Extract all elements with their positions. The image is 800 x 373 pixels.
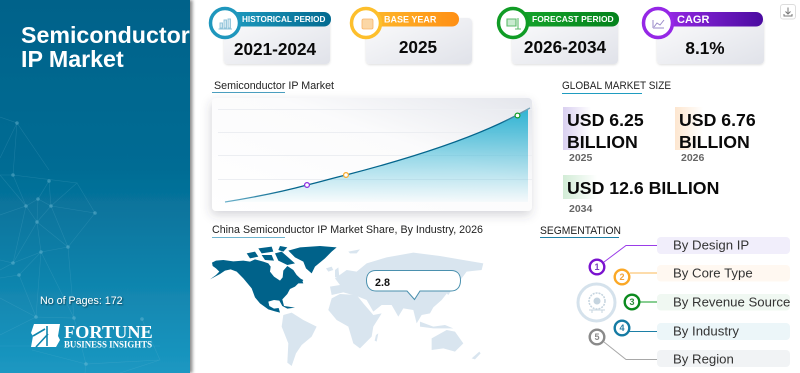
market size 2026: USD 6.76 [679,110,756,130]
segment 4 [615,321,790,340]
market size 2026 [675,107,756,164]
market size 2025: USD 6.25 [567,110,644,130]
stat card: forecast period: FORECAST PERIOD [532,14,614,24]
stat card: forecast period [498,8,619,64]
segment 4: 4 [619,323,625,333]
map: rest of world [282,249,483,366]
market size 2034 [563,175,719,215]
main title: Semiconductor [21,22,190,48]
segmentation hub icon [578,284,615,321]
map heading: China Semiconductor IP Market Share, By Industry, 2026 [212,224,483,236]
stat card: forecast period: 2026-2034 [524,37,607,57]
stat card: historical period: HISTORICAL PERIOD [242,15,325,24]
global market size heading: GLOBAL MARKET SIZE [562,80,671,92]
segmentation heading: SEGMENTATION [540,225,621,237]
segment 1: 1 [594,262,600,272]
logo: Fortune Business Insights [31,322,153,350]
market size 2034: 2034 [569,203,593,215]
world map [210,246,483,366]
icon: growth chart [653,20,664,28]
data marker 2034 [515,113,520,118]
main title: IP Market [21,46,124,72]
icon: bar chart [218,19,232,29]
map callout: 2.8 [375,277,390,289]
market size 2026: BILLION [679,132,750,152]
segment 2 [615,265,790,284]
icon: forecast screen [507,18,521,29]
data marker 2026 [344,173,348,177]
segment 1: By Design IP [673,238,749,252]
sidebar panel [0,0,190,373]
stat card: base year [352,8,472,64]
segment 5 [590,330,790,367]
main title [21,22,190,72]
map: North America highlighted [210,246,337,313]
stat card: historical period: 2021-2024 [234,39,317,59]
segment 3 [625,294,790,310]
stat card: base year: 2025 [399,37,438,57]
market size 2026: 2026 [681,152,705,164]
logo: Fortune Business Insights: BUSINESS INSIGHTS [64,340,152,350]
stat card: CAGR [644,8,764,64]
area chart panel [212,98,532,211]
segment 5: 5 [594,332,600,342]
market size 2025 [563,107,644,164]
stat card: base year: BASE YEAR [384,14,437,24]
segment 4: By Industry [673,324,739,338]
page count: No of Pages: 172 [40,295,123,307]
data marker 2025 [305,183,309,187]
market size 2025: 2025 [569,152,593,164]
segment 5: By Region [673,352,734,366]
segment 1 [590,237,790,274]
stat card: CAGR: CAGR [677,14,709,26]
area fill [225,109,528,202]
segment 3: By Revenue Source [673,294,790,310]
stat card: historical period [210,8,331,64]
segment 3: 3 [629,297,635,307]
growth curve [225,108,530,202]
download button [780,4,796,19]
line chart heading: Semiconductor IP Market [214,80,334,92]
map callout [366,270,460,300]
segment 2: 2 [619,272,625,282]
icon: calendar [362,19,373,29]
segment 2: By Core Type [673,266,753,280]
market size 2034: USD 12.6 BILLION [567,178,719,198]
logo: Fortune Business Insights: FORTUNE [64,322,153,342]
stat card: CAGR: 8.1% [685,38,725,58]
market size 2025: BILLION [567,132,638,152]
